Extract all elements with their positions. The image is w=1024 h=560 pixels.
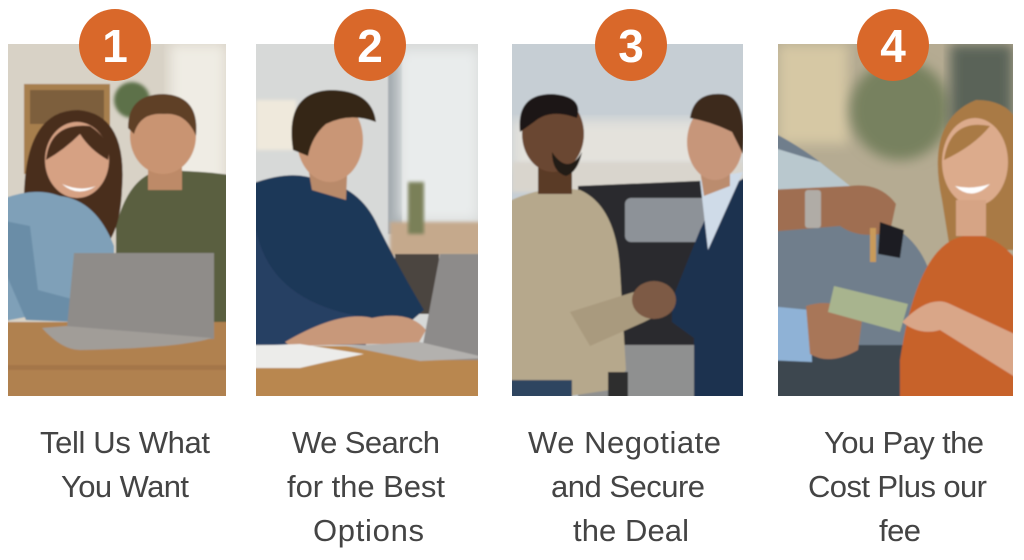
step 2 number badge: 2 xyxy=(357,20,383,72)
step 1 caption: Tell Us What xyxy=(40,425,210,460)
step 2 caption: Options xyxy=(313,513,424,548)
step 3 number badge: 3 xyxy=(618,20,644,72)
step 1 caption: You Want xyxy=(61,469,189,504)
step 1 number badge xyxy=(79,9,151,81)
step 4 number badge xyxy=(857,9,929,81)
panel: step 2 photo, man at a laptop xyxy=(256,44,478,396)
step 2 caption: We Search xyxy=(292,425,440,460)
panel: step 4 photo, key and cash exchange xyxy=(778,44,1013,396)
step 3 caption: the Deal xyxy=(573,513,689,548)
step 3 number badge xyxy=(595,9,667,81)
step 4 caption: fee xyxy=(879,513,921,548)
step 4 number badge: 4 xyxy=(880,20,906,72)
step 4 caption: Cost Plus our xyxy=(808,469,987,504)
step 2 number badge xyxy=(334,9,406,81)
step 4 caption: You Pay the xyxy=(824,425,984,460)
step 3 caption: and Secure xyxy=(551,469,705,504)
panel: step 1 photo, couple at a laptop xyxy=(8,44,226,396)
panel: step 3 photo, handshake by a car xyxy=(512,44,743,396)
step 2 caption: for the Best xyxy=(287,469,445,504)
step 3 caption: We Negotiate xyxy=(528,425,721,460)
step 1 number badge: 1 xyxy=(102,20,128,72)
